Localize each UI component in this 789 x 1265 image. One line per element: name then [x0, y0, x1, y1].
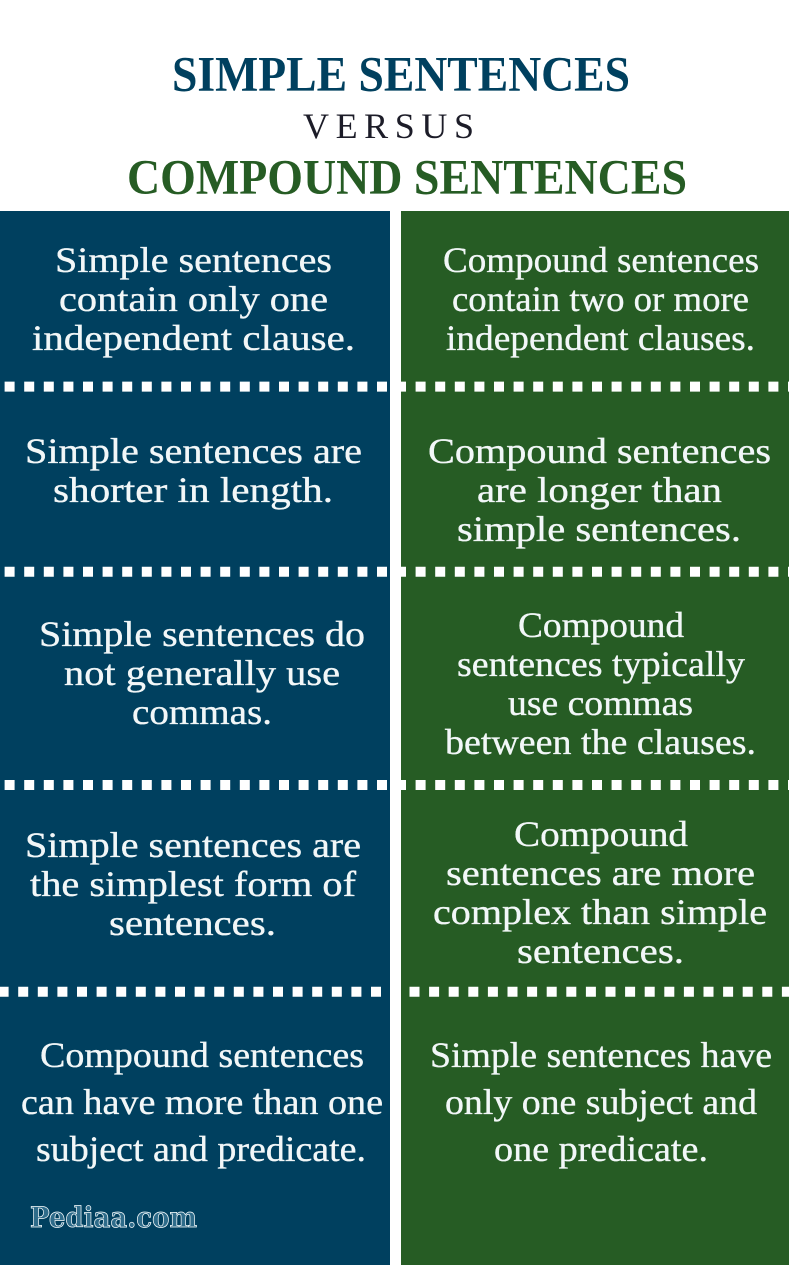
panel: simple sentences column	[0, 211, 390, 1265]
text: simple row 2	[25, 431, 362, 510]
text: compound row 3: Compound	[518, 605, 684, 645]
text: simple row 4: sentences.	[109, 903, 276, 943]
text: compound row 5: only one subject and	[445, 1082, 757, 1122]
text: simple row 1: Simple sentences	[55, 240, 332, 280]
text: simple row 1: independent clause.	[32, 318, 355, 358]
logo: Pediaa.com: Pediaa.com	[30, 1201, 197, 1234]
text: compound row 4: complex than simple	[433, 892, 767, 932]
text: compound row 2: are longer than	[477, 470, 722, 510]
title block	[127, 46, 687, 205]
heading: compound sentences: COMPOUND SENTENCES	[127, 149, 687, 205]
text: simple row 3: commas.	[132, 692, 272, 732]
text: simple row 1	[32, 240, 355, 358]
text: compound row 5: Simple sentences have	[430, 1035, 772, 1075]
text: simple row 4: the simplest form of	[30, 864, 356, 904]
text: simple row 3	[39, 614, 365, 732]
text: compound row 2: simple sentences.	[457, 509, 741, 549]
text: compound row 1: contain two or more	[452, 279, 749, 319]
text: simple row 3: not generally use	[64, 653, 340, 693]
text: simple row 1: contain only one	[59, 279, 328, 319]
text: simple row 5: subject and predicate.	[36, 1129, 366, 1169]
text: simple row 3: Simple sentences do	[39, 614, 365, 654]
text: compound row 3: between the clauses.	[445, 722, 756, 762]
text: simple row 5: Compound sentences	[40, 1035, 364, 1075]
text: simple row 2: shorter in length.	[53, 470, 333, 510]
panel: compound sentences column	[401, 211, 789, 1265]
text: compound row 4: Compound	[514, 814, 688, 854]
text: compound row 3: use commas	[508, 683, 693, 723]
text: simple row 4	[25, 825, 361, 943]
text: compound row 5: one predicate.	[494, 1129, 708, 1169]
text: compound row 2	[428, 431, 771, 549]
heading: versus: VERSUS	[303, 106, 474, 146]
text: compound row 1: Compound sentences	[443, 240, 759, 280]
text: compound row 5	[430, 1035, 772, 1169]
text: simple row 2: Simple sentences are	[25, 431, 362, 471]
text: compound row 3	[445, 605, 756, 762]
text: simple row 5	[21, 1035, 383, 1169]
text: compound row 4: sentences.	[517, 931, 684, 971]
text: simple row 5: can have more than one	[21, 1082, 383, 1122]
text: compound row 1: independent clauses.	[446, 318, 755, 358]
heading: simple sentences: SIMPLE SENTENCES	[172, 46, 630, 102]
text: compound row 3: sentences typically	[457, 644, 745, 684]
text: compound row 4	[433, 814, 767, 971]
text: simple row 4: Simple sentences are	[25, 825, 361, 865]
text: compound row 1	[443, 240, 759, 358]
text: compound row 4: sentences are more	[446, 853, 755, 893]
dotted row dividers	[0, 387, 789, 992]
text: compound row 2: Compound sentences	[428, 431, 771, 471]
